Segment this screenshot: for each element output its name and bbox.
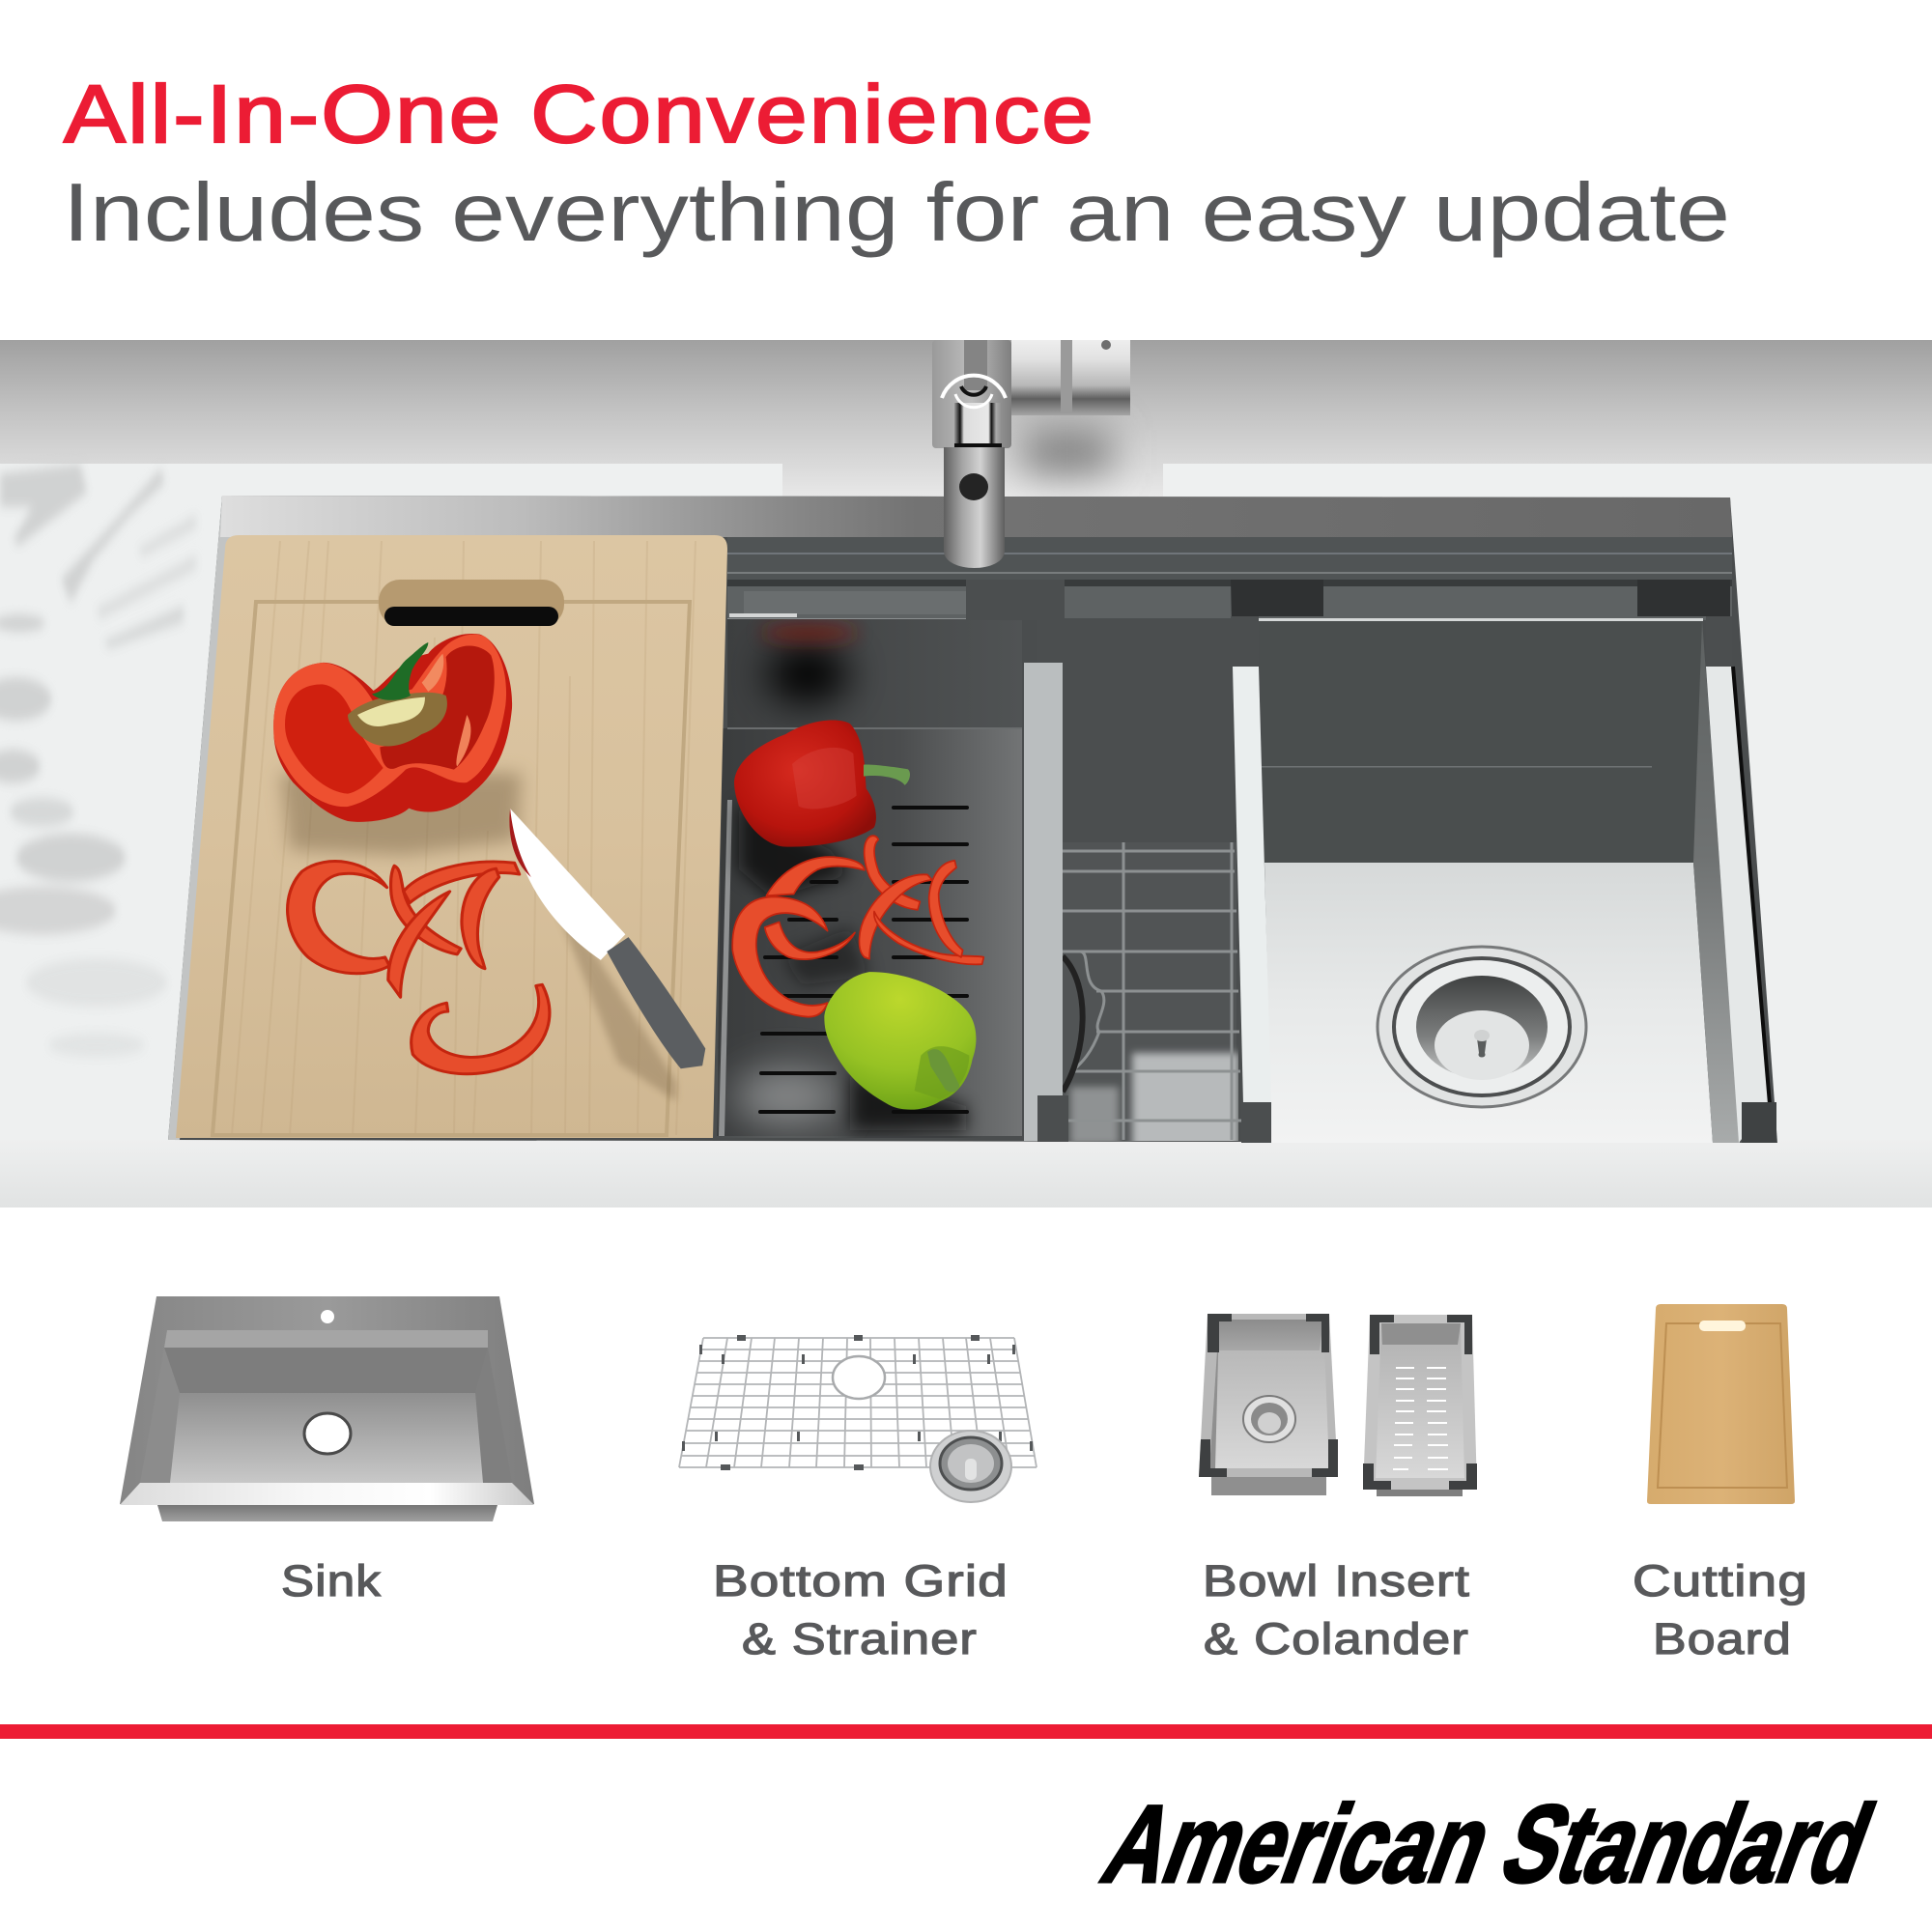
icon: bottom grid and strainer <box>679 1335 1037 1502</box>
colander floor shadows <box>739 802 966 1130</box>
right bowl back wall <box>1259 620 1702 863</box>
bowl corner clips <box>1231 580 1776 1143</box>
tap hole <box>321 1310 334 1323</box>
wood grain <box>232 541 696 1135</box>
label: bottom grid and strainer: Bottom Grid <box>713 1556 1009 1605</box>
sink opening <box>168 496 1777 1143</box>
left sliver of sink wall <box>168 496 232 1140</box>
label: bottom grid and strainer <box>713 1556 1009 1663</box>
faucet shadow <box>1024 430 1111 473</box>
green pepper <box>824 972 976 1110</box>
right wall <box>475 1348 512 1483</box>
pepper core <box>348 693 447 746</box>
wall behind the sink <box>0 340 1932 466</box>
right bowl rim <box>1259 618 1703 621</box>
back wall <box>164 1348 488 1393</box>
colander floor light areas <box>719 727 1022 1136</box>
colander rim highlight <box>727 618 966 619</box>
icon: bowl insert <box>1199 1314 1338 1495</box>
back wall lip <box>220 496 1732 537</box>
middle channel <box>1063 618 1238 1150</box>
rubber feet <box>682 1335 1033 1470</box>
countertop <box>0 464 1932 1208</box>
bowl left edge strip <box>1233 667 1271 1104</box>
under-mount body <box>157 1505 497 1521</box>
handle cutout <box>379 580 564 626</box>
bowl right edge strip <box>1706 667 1769 1143</box>
colander shadow and reflection <box>761 624 858 703</box>
right bowl seam <box>1262 766 1652 767</box>
left wall <box>140 1348 180 1483</box>
drain hole <box>304 1413 351 1454</box>
knife shadow <box>541 869 676 1101</box>
right bowl floor <box>1264 863 1713 1143</box>
label: cutting board: Cutting <box>1633 1556 1808 1605</box>
bowl insert clips <box>1199 1314 1338 1477</box>
label: sink: Sink <box>281 1556 382 1605</box>
colander interior <box>717 616 1022 1136</box>
rail <box>164 1330 488 1348</box>
pepper shadow on board <box>280 773 522 855</box>
colander icon slots <box>1393 1367 1448 1470</box>
label: bowl insert and colander <box>1203 1556 1470 1663</box>
halved red pepper <box>273 634 512 822</box>
rail bands <box>727 537 1732 620</box>
label: cutting board <box>1633 1556 1808 1663</box>
pepper stem <box>372 642 428 700</box>
bottom grid in the sink <box>1063 842 1241 1140</box>
red divider bar <box>0 1724 1932 1739</box>
colander back wall <box>727 619 966 727</box>
colander floor <box>717 728 1022 1136</box>
faucet <box>932 340 1130 568</box>
right bowl side wall <box>1693 620 1740 1143</box>
colander corner clips <box>966 580 1068 1142</box>
colander right edge <box>1024 663 1063 1141</box>
subtitle: Includes everything for an easy update <box>63 167 1730 259</box>
panel: kitchen sink photo <box>0 340 1932 1208</box>
icon: sink <box>120 1296 534 1521</box>
sink floor <box>170 1393 483 1483</box>
label: bowl insert and colander: & Colander <box>1204 1614 1469 1663</box>
icon: colander <box>1363 1315 1477 1496</box>
juice groove <box>213 602 690 1135</box>
slices in the colander <box>732 836 983 1017</box>
whole red pepper <box>734 720 910 847</box>
slices on the cutting board <box>288 862 550 1074</box>
strainer <box>930 1431 1011 1502</box>
grid drain opening <box>833 1356 885 1399</box>
knife <box>509 809 705 1068</box>
colander icon clips <box>1363 1315 1477 1490</box>
icon: cutting board <box>1647 1304 1795 1504</box>
front flange <box>120 1483 534 1505</box>
vegetables in the colander <box>732 720 983 1110</box>
bowl drain <box>1378 947 1586 1107</box>
label: cutting board: Board <box>1653 1614 1792 1663</box>
leaf shadows on the counter <box>0 464 196 1057</box>
label: bowl insert and colander: Bowl Insert <box>1203 1556 1470 1605</box>
bowl insert drain <box>1243 1396 1295 1442</box>
cutting board in the sink <box>176 535 727 1138</box>
label: bottom grid and strainer: & Strainer <box>742 1614 978 1663</box>
colander slots <box>758 806 969 1114</box>
title: All-In-One Convenience <box>64 69 1095 159</box>
black gap line on the right <box>1733 667 1770 1104</box>
